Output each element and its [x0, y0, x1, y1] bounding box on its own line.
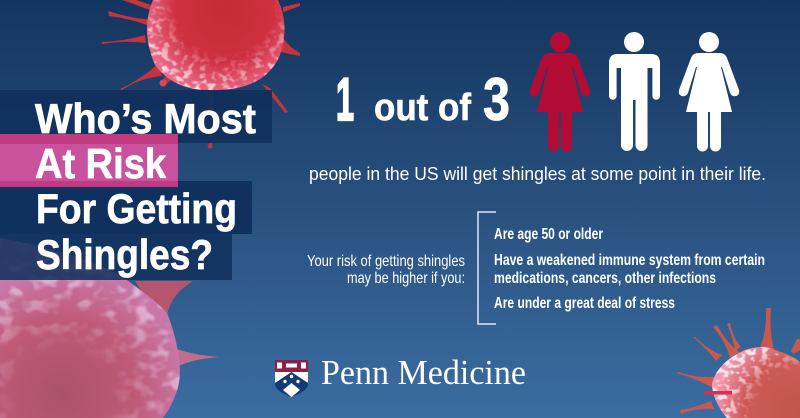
risk factor list [494, 226, 765, 312]
virus: lower left [0, 238, 220, 418]
risk factor list: medications, cancers, other infections [494, 270, 716, 287]
statistic: 1 out of 3: 1 [336, 66, 354, 133]
title bar: Who's Most [0, 90, 272, 143]
title line 2: At Risk [35, 140, 167, 187]
title line 1: Who’s Most [35, 95, 256, 142]
virus: top [102, 0, 300, 148]
icon: white woman [679, 32, 739, 152]
statistic: 1 out of 3 [336, 66, 510, 133]
title bar: At Risk [0, 134, 178, 187]
risk intro text: Your risk of getting shingles [307, 253, 465, 270]
risk intro text [307, 253, 465, 287]
risk factor list: Are under a great deal of stress [494, 295, 675, 312]
title block [0, 90, 272, 280]
logo: Penn Medicine wordmark: Penn Medicine [321, 353, 526, 392]
statistic: 1 out of 3: out of [374, 87, 471, 129]
risk factor list: Are age 50 or older [494, 226, 603, 243]
title line 4: Shingles? [36, 231, 213, 278]
title line 3: For Getting [36, 185, 237, 232]
virus: bottom right [676, 308, 800, 418]
statistic caption: people in the US will get shingles at some point in their life. [309, 163, 766, 184]
title bar: Shingles [0, 234, 232, 280]
risk intro text: may be higher if you: [347, 270, 465, 287]
bracket [478, 212, 496, 324]
statistic: 1 out of 3: 3 [483, 66, 510, 133]
icon: white man [609, 32, 660, 151]
logo: Penn shield [275, 360, 308, 397]
icon: red woman [530, 32, 590, 152]
title bar: For Getting [0, 181, 252, 234]
